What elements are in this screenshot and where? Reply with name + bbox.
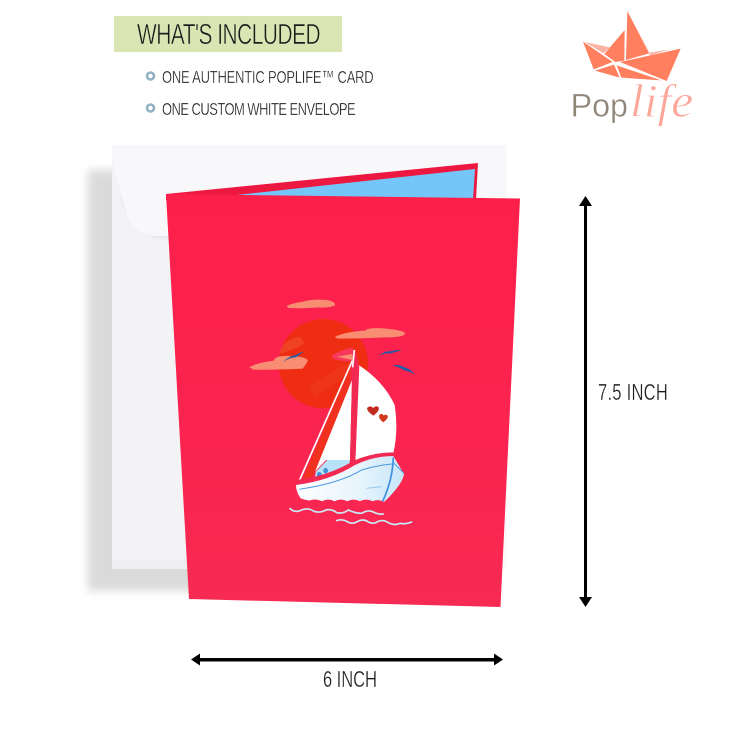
envelope shadow: [88, 170, 218, 591]
wordmark: life: life: [630, 76, 693, 128]
bullet item: envelope: ONE CUSTOM WHITE ENVELOPE: [162, 100, 356, 120]
mast flag: [332, 347, 353, 361]
left jib sail: [302, 364, 351, 481]
main sail: [355, 365, 396, 461]
logo: poplife: [571, 11, 693, 128]
card back with blue interior: [166, 163, 478, 200]
jib white edge: [299, 361, 352, 481]
envelope flap shadow: [122, 190, 400, 239]
arrow: height dimension: [579, 196, 592, 607]
mast: [350, 350, 359, 463]
label: 6 inch: 6 INCH: [323, 667, 377, 693]
cloud top: [287, 300, 335, 308]
heading: what's included: WHAT'S INCLUDED: [137, 19, 321, 51]
cloud right: [335, 328, 405, 339]
bullet item: card: ONE AUTHENTIC POPLIFE™ CARD: [162, 68, 374, 88]
envelope flap: [112, 145, 507, 236]
sun highlight: [279, 337, 305, 353]
hull: [296, 456, 404, 502]
illustration: sailboat: [249, 300, 415, 524]
waves: [290, 509, 412, 524]
envelope: [112, 145, 507, 569]
white fore sail: [315, 380, 352, 472]
sail backing to hide sun: [299, 362, 353, 482]
cloud left: [249, 356, 308, 370]
hearts: [367, 406, 379, 416]
hull blue lines: [299, 464, 392, 489]
hull red stripe: [299, 454, 393, 481]
cabin: [314, 460, 350, 481]
icon: origami boat: [583, 11, 681, 81]
sun: [279, 319, 368, 408]
wordmark: pop: Pop: [571, 88, 628, 124]
arrow: width dimension: [191, 654, 503, 666]
list: included items: [147, 68, 374, 120]
birds: [283, 350, 415, 374]
card front: [166, 194, 520, 607]
label: 7.5 inch: 7.5 INCH: [598, 380, 668, 406]
